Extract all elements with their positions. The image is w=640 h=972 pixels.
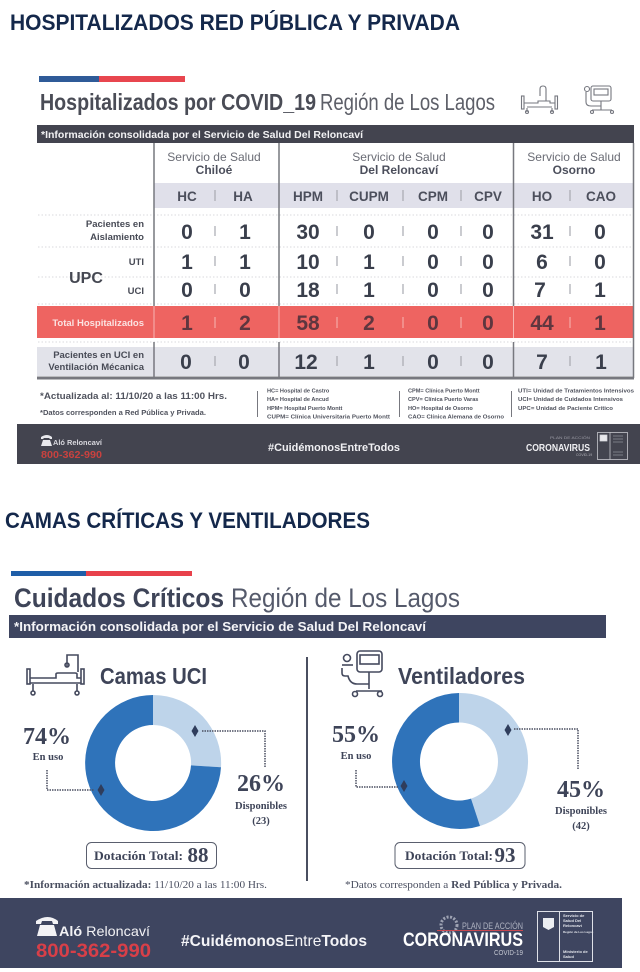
callout: 74% en uso: 74%: [23, 724, 71, 750]
legend: HA= Hospital de Ancud: [267, 397, 329, 403]
row: UTI: 0: [594, 251, 606, 274]
total box: camas: Dotación Total:: [94, 849, 183, 863]
row: UCI: 0: [181, 279, 193, 302]
row: aislamiento: 31: [530, 221, 554, 244]
row: UCI: 0: [239, 279, 251, 302]
plan coronavirus: COVID-19: [494, 950, 523, 957]
legend: CPM= Clínica Puerto Montt: [408, 388, 480, 394]
legend: CPV= Clínica Puerto Varas: [408, 397, 478, 403]
update note: [40, 391, 227, 417]
panel title: Región de Los Lagos: [231, 583, 460, 613]
row labels: UCI: [128, 286, 144, 297]
callout: 26% disponibles: [192, 725, 287, 827]
row: aislamiento: 0: [181, 221, 193, 244]
logo: servicio de salud: Región de Los Lagos: [563, 930, 594, 934]
update note: *Datos corresponden a Red Pública y Privada.: [40, 408, 206, 417]
column codes: HPM: [293, 189, 323, 204]
column codes: CUPM: [349, 189, 389, 204]
row: aislamiento: 1: [239, 221, 251, 244]
panel: hospitalizados por COVID-19: [17, 76, 640, 464]
ventilación mecánica band: [37, 347, 634, 376]
row: UCI: 1: [594, 279, 606, 302]
footer band: 800-362-990: [41, 450, 102, 461]
row: aislamiento: 0: [363, 221, 375, 244]
footer band: #CuidémonosEntreTodos: [268, 442, 400, 454]
service headers: Del Reloncaví: [360, 163, 439, 177]
row: total hospitalizados: [181, 312, 606, 335]
panel: cuidados críticos: [0, 571, 622, 968]
callout: 26% disponibles: Disponibles: [235, 801, 287, 812]
callout: 55% en uso: [332, 722, 408, 792]
row: UCI: 7: [534, 279, 546, 302]
logo: servicio de salud: [598, 432, 628, 460]
heading: camas críticas y ventiladores: CAMAS CRÍTICAS Y VENTILADORES: [5, 508, 370, 533]
hashtag: #CuidémonosEntreTodos: [181, 933, 367, 950]
row: aislamiento: 0: [482, 221, 494, 244]
legend: UPC= Unidad de Paciente Crítico: [518, 406, 614, 412]
footer band: COVID-19: [576, 453, 592, 457]
row: UCI: 18: [296, 279, 320, 302]
row: aislamiento: [181, 221, 606, 244]
total box: ventiladores: Dotación Total:: [405, 849, 493, 863]
note: datos: *Datos corresponden a Red Pública y Privada.: [345, 880, 562, 891]
row: ventilación mecánica: 1: [595, 351, 607, 374]
row: UTI: 1: [363, 251, 375, 274]
service headers: Servicio de Salud: [527, 150, 621, 164]
row: UCI: [181, 279, 606, 302]
row: ventilación mecánica: 0: [427, 351, 439, 374]
callout: 26% disponibles: 26%: [237, 771, 285, 797]
total box: camas: 88: [188, 843, 208, 867]
logo: servicio de salud: Ministerio de: [563, 949, 588, 954]
row: aislamiento: 0: [427, 221, 439, 244]
footer band: [0, 898, 622, 968]
row: ventilación mecánica: 0: [238, 351, 250, 374]
row: total hospitalizados: 2: [239, 312, 251, 335]
row dividers: [38, 215, 632, 342]
row: UCI: 0: [482, 279, 494, 302]
icon: hospital bed: [522, 86, 558, 114]
helpline: 800-362-990: [36, 941, 151, 962]
column separators: [215, 190, 570, 366]
flag stripe: [39, 76, 185, 82]
callout: 45% disponibles: (42): [572, 821, 590, 832]
row: total hospitalizados: 44: [530, 312, 554, 335]
logo: servicio de salud: Salud: [563, 954, 574, 959]
logo: servicio de salud: [538, 912, 594, 962]
legend: CAO= Clínica Alemana de Osorno: [408, 414, 505, 420]
row labels: Aislamiento: [90, 232, 144, 243]
column codes: [177, 189, 616, 204]
row: UTI: 6: [536, 251, 548, 274]
column codes: CAO: [586, 189, 616, 204]
row labels: Total Hospitalizados: [52, 318, 144, 329]
column header band: [154, 183, 634, 208]
row labels: UPC: [69, 270, 103, 287]
divider: [306, 657, 308, 881]
service headers: Servicio de Salud: [167, 150, 261, 164]
helpline: [36, 923, 151, 962]
donut: camas UCI: [85, 695, 221, 831]
legend: UTI= Unidad de Tratamientos Intensivos: [518, 388, 634, 394]
legend: HO= Hospital de Osorno: [408, 406, 473, 412]
row: UTI: 1: [181, 251, 193, 274]
column codes: HA: [233, 189, 253, 204]
logo: servicio de salud: Servicio de: [563, 913, 585, 918]
row: UTI: 0: [482, 251, 494, 274]
note: información actualizada: *Información actualizada: 11/10/20 a las 11:00 Hrs.: [24, 880, 267, 891]
panel title: Región de Los Lagos: [320, 89, 495, 115]
update note: *Actualizada al: 11/10/20 a las 11:00 Hrs.: [40, 391, 227, 402]
column codes: HC: [177, 189, 197, 204]
plan coronavirus: CORONAVIRUS: [403, 930, 523, 951]
callout: 55% en uso: 55%: [332, 722, 380, 748]
total box: camas: [86, 842, 216, 868]
info bar: *Información consolidada por el Servicio de Salud Del Reloncaví: [41, 130, 364, 141]
total hospitalizados band: [37, 306, 634, 338]
row: aislamiento: 30: [296, 221, 320, 244]
icon: ventilator: [584, 86, 614, 114]
column codes: HO: [532, 189, 552, 204]
row labels: Pacientes en: [86, 219, 144, 230]
info bar: [9, 615, 606, 638]
row: ventilación mecánica: 0: [482, 351, 494, 374]
footer band: PLAN DE ACCIÓN: [550, 435, 590, 440]
helpline: Aló Reloncaví: [59, 923, 150, 939]
legend: HC= Hospital de Castro: [267, 388, 330, 394]
service headers: [167, 150, 621, 177]
heading: hospitalizados red pública y privada: HOSPITALIZADOS RED PÚBLICA Y PRIVADA: [10, 10, 460, 35]
logo: servicio de salud: Reloncaví: [563, 923, 583, 928]
row: total hospitalizados: 0: [482, 312, 494, 335]
total box: ventiladores: [395, 842, 525, 868]
callout: 74% en uso: [23, 724, 104, 796]
label: ventiladores: Ventiladores: [398, 663, 525, 689]
row labels: [48, 219, 145, 373]
row: total hospitalizados: 1: [594, 312, 606, 335]
row: ventilación mecánica: [180, 351, 607, 374]
donut: ventiladores: [392, 693, 528, 829]
row: UCI: 1: [363, 279, 375, 302]
row: total hospitalizados: 1: [181, 312, 193, 335]
icon: hospital bed: [27, 655, 84, 695]
row labels: Ventilación Mécanica: [48, 362, 145, 373]
row: total hospitalizados: 58: [296, 312, 320, 335]
row: ventilación mecánica: 7: [536, 351, 548, 374]
row: total hospitalizados: 0: [427, 312, 439, 335]
row: aislamiento: 0: [594, 221, 606, 244]
legend: UCI= Unidad de Cuidados Intensivos: [518, 397, 623, 403]
row: ventilación mecánica: 12: [294, 351, 318, 374]
row: UTI: [181, 251, 606, 274]
column codes: CPV: [474, 189, 502, 204]
callout: 45% disponibles: [504, 724, 607, 832]
legend: HPM= Hospital Puerto Montt: [267, 406, 342, 412]
callout: 45% disponibles: 45%: [557, 777, 605, 803]
icon: telephone: [36, 917, 58, 936]
panel title: Cuidados Críticos: [14, 583, 224, 613]
row: UTI: 10: [296, 251, 320, 274]
plan coronavirus: PLAN DE ACCIÓN: [462, 921, 523, 931]
row labels: Pacientes en UCI en: [53, 350, 144, 361]
row labels: UTI: [129, 257, 144, 268]
callout: 45% disponibles: Disponibles: [555, 806, 607, 817]
service headers: Servicio de Salud: [352, 150, 446, 164]
row: UCI: 0: [427, 279, 439, 302]
callout: 55% en uso: En uso: [341, 751, 371, 762]
footer band: CORONAVIRUS: [526, 442, 590, 454]
label: camas UCI: Camas UCI: [100, 663, 207, 689]
info bar: [37, 125, 634, 143]
footer band: [17, 424, 640, 464]
logo: servicio de salud: Salud Del: [563, 918, 581, 923]
row: ventilación mecánica: 1: [363, 351, 375, 374]
icon: ventilator: [342, 651, 382, 696]
service headers: Chiloé: [196, 163, 233, 177]
row: UTI: 1: [239, 251, 251, 274]
row: ventilación mecánica: 0: [180, 351, 192, 374]
flag stripe: [11, 571, 192, 576]
panel title: Hospitalizados por COVID_19: [40, 89, 316, 115]
column codes: CPM: [418, 189, 448, 204]
callout: 74% en uso: En uso: [33, 752, 63, 763]
table frame lines: [37, 143, 634, 378]
plan coronavirus: [403, 917, 523, 957]
legend: [258, 388, 634, 420]
legend: CUPM= Clínica Universitaria Puerto Montt: [267, 414, 390, 420]
info bar: *Información consolidada por el Servicio de Salud Del Reloncaví: [14, 620, 427, 634]
total box: ventiladores: 93: [494, 843, 516, 867]
footer band: Aló Reloncaví: [53, 440, 103, 447]
row: total hospitalizados: 2: [363, 312, 375, 335]
callout: 26% disponibles: (23): [252, 816, 270, 827]
row: UTI: 0: [427, 251, 439, 274]
icon: telephone: [41, 435, 52, 446]
service headers: Osorno: [553, 163, 595, 177]
